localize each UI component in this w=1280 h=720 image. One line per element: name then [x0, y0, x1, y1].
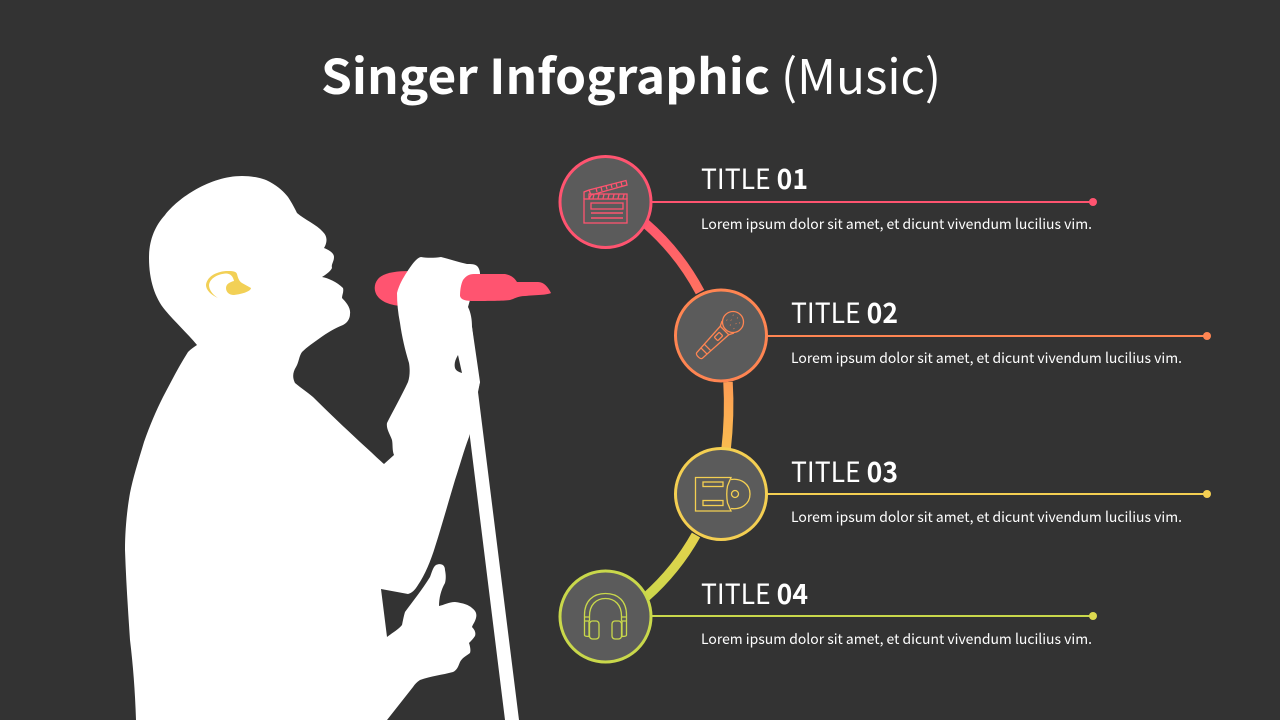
- text 01: Lorem ipsum dolor sit amet, et dicunt vivendum lucilius vim.: [701, 214, 1092, 234]
- microphone back: [375, 271, 410, 306]
- item 04: [560, 571, 1097, 662]
- item 02: [676, 290, 1211, 381]
- node 02: [676, 290, 766, 381]
- icon: headphones: [584, 594, 626, 639]
- title 04: TITLE 04: [701, 573, 808, 613]
- item 03: [676, 448, 1211, 540]
- icon: microphone: [691, 307, 748, 364]
- text 02: Lorem ipsum dolor sit amet, et dicunt vivendum lucilius vim.: [791, 348, 1182, 368]
- node 01: [560, 156, 651, 248]
- connector line 03: [766, 493, 1207, 495]
- text 03: Lorem ipsum dolor sit amet, et dicunt vivendum lucilius vim.: [791, 507, 1182, 527]
- connector line 04: [650, 615, 1093, 617]
- icon: clapperboard: [584, 180, 627, 223]
- title 01: TITLE 01: [701, 158, 808, 198]
- ear accent: [206, 271, 251, 298]
- title 03: TITLE 03: [791, 451, 898, 491]
- connector line 02: [766, 335, 1207, 337]
- title: Singer Infographic: [321, 38, 770, 108]
- pole: [462, 327, 519, 720]
- node 04: [560, 571, 651, 662]
- node 03: [676, 448, 766, 540]
- icon: cd case: [696, 478, 750, 511]
- title 02: TITLE 02: [791, 292, 898, 332]
- item 01: [560, 156, 1097, 248]
- singer silhouette: [125, 176, 551, 720]
- connecting arc: [645, 223, 729, 597]
- body outline: [125, 176, 480, 720]
- title: (Music): [781, 38, 941, 108]
- text 04: Lorem ipsum dolor sit amet, et dicunt vivendum lucilius vim.: [701, 629, 1092, 649]
- connector line 01: [650, 201, 1093, 203]
- microphone front: [460, 274, 551, 301]
